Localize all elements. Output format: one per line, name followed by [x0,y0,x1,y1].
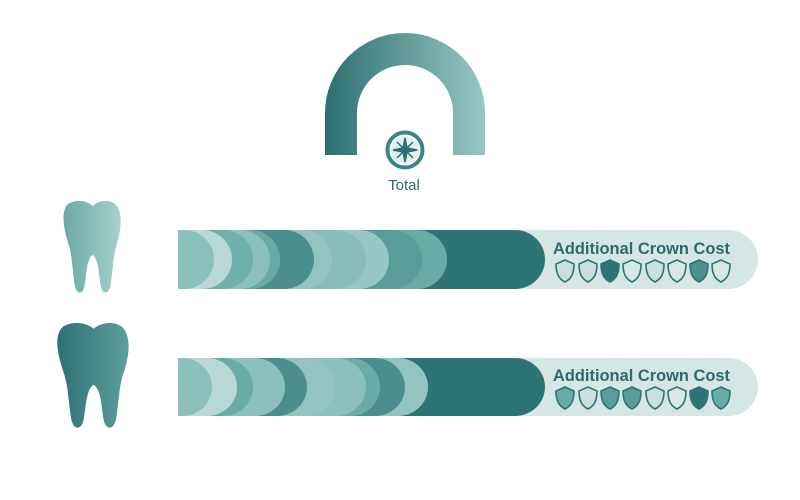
label: additional crown cost 2: Additional Crown Cost [553,366,730,385]
bar row 1 [178,230,758,289]
shields row 2 [556,387,730,409]
icon: total star [385,130,425,170]
label: additional crown cost 1: Additional Crown Cost [553,239,730,258]
icon: tooth row 2 [57,323,129,428]
label: Total: Total [388,177,420,194]
shields row 1 [556,260,730,282]
arch: total [325,33,485,155]
bar row 2 [178,358,758,416]
icon: tooth row 1 [63,201,121,293]
